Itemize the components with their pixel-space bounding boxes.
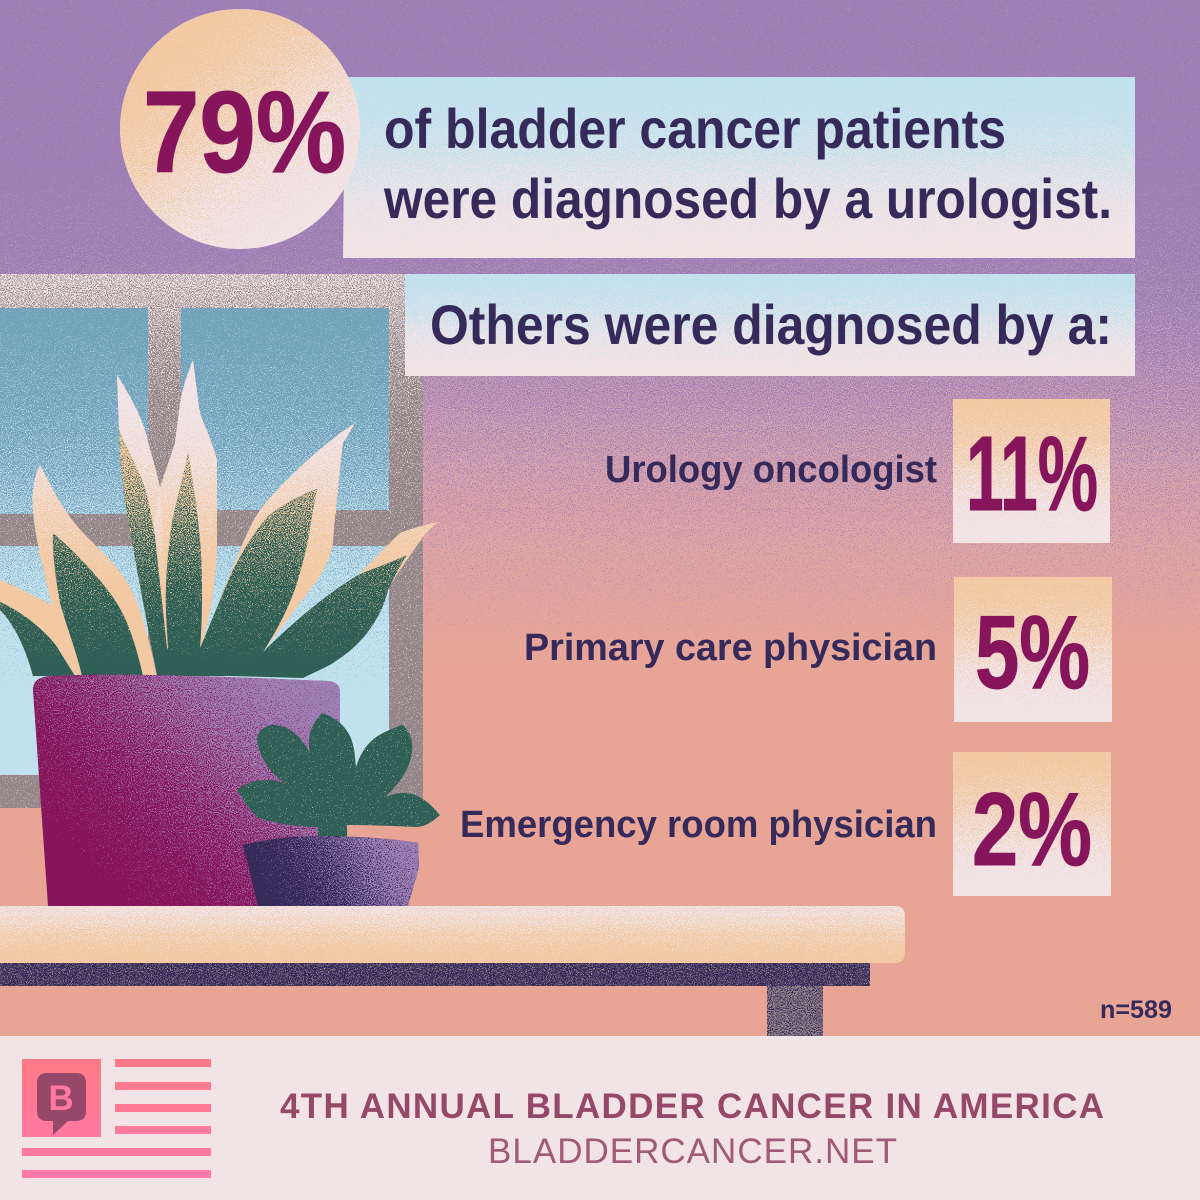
panel: others heading: Others were diagnosed by a: <box>430 293 1112 356</box>
stat row: urology oncologist <box>605 399 1110 543</box>
headline text: were diagnosed by a urologist. <box>383 167 1112 230</box>
stat row: primary care physician: Primary care physician <box>524 627 937 669</box>
stat row: primary care physician <box>524 577 1112 722</box>
panel: others heading <box>405 274 1135 376</box>
icon: large plant pot <box>33 675 340 906</box>
footer url: BLADDERCANCER.NET <box>488 1132 897 1171</box>
icon: snake plant <box>0 360 438 678</box>
stat row: primary care physician: 5% <box>975 595 1090 711</box>
stat row: emergency room physician: 2% <box>972 772 1092 888</box>
shelf <box>0 906 905 1037</box>
stat row: urology oncologist: 11% <box>966 415 1098 533</box>
sample size note: n=589 <box>1100 996 1172 1024</box>
window <box>0 274 423 808</box>
footer title: 4TH ANNUAL BLADDER CANCER IN AMERICA <box>280 1087 1104 1126</box>
headline text: of bladder cancer patients <box>384 97 1006 160</box>
stat circle: 79% <box>120 9 360 249</box>
stat row: urology oncologist: Urology oncologist <box>605 449 937 491</box>
panel: headline box <box>343 77 1135 258</box>
stat row: emergency room physician: Emergency room physician <box>460 804 937 846</box>
stat circle: 79%: 79% <box>143 67 346 197</box>
icon: bladdercancer.net logo <box>22 1059 211 1178</box>
footer band <box>0 1036 1200 1200</box>
icon: small plant pot <box>243 836 419 906</box>
stat row: emergency room physician <box>460 752 1111 896</box>
icon: bladdercancer.net logo: B <box>48 1079 74 1118</box>
icon: succulent <box>237 713 440 840</box>
